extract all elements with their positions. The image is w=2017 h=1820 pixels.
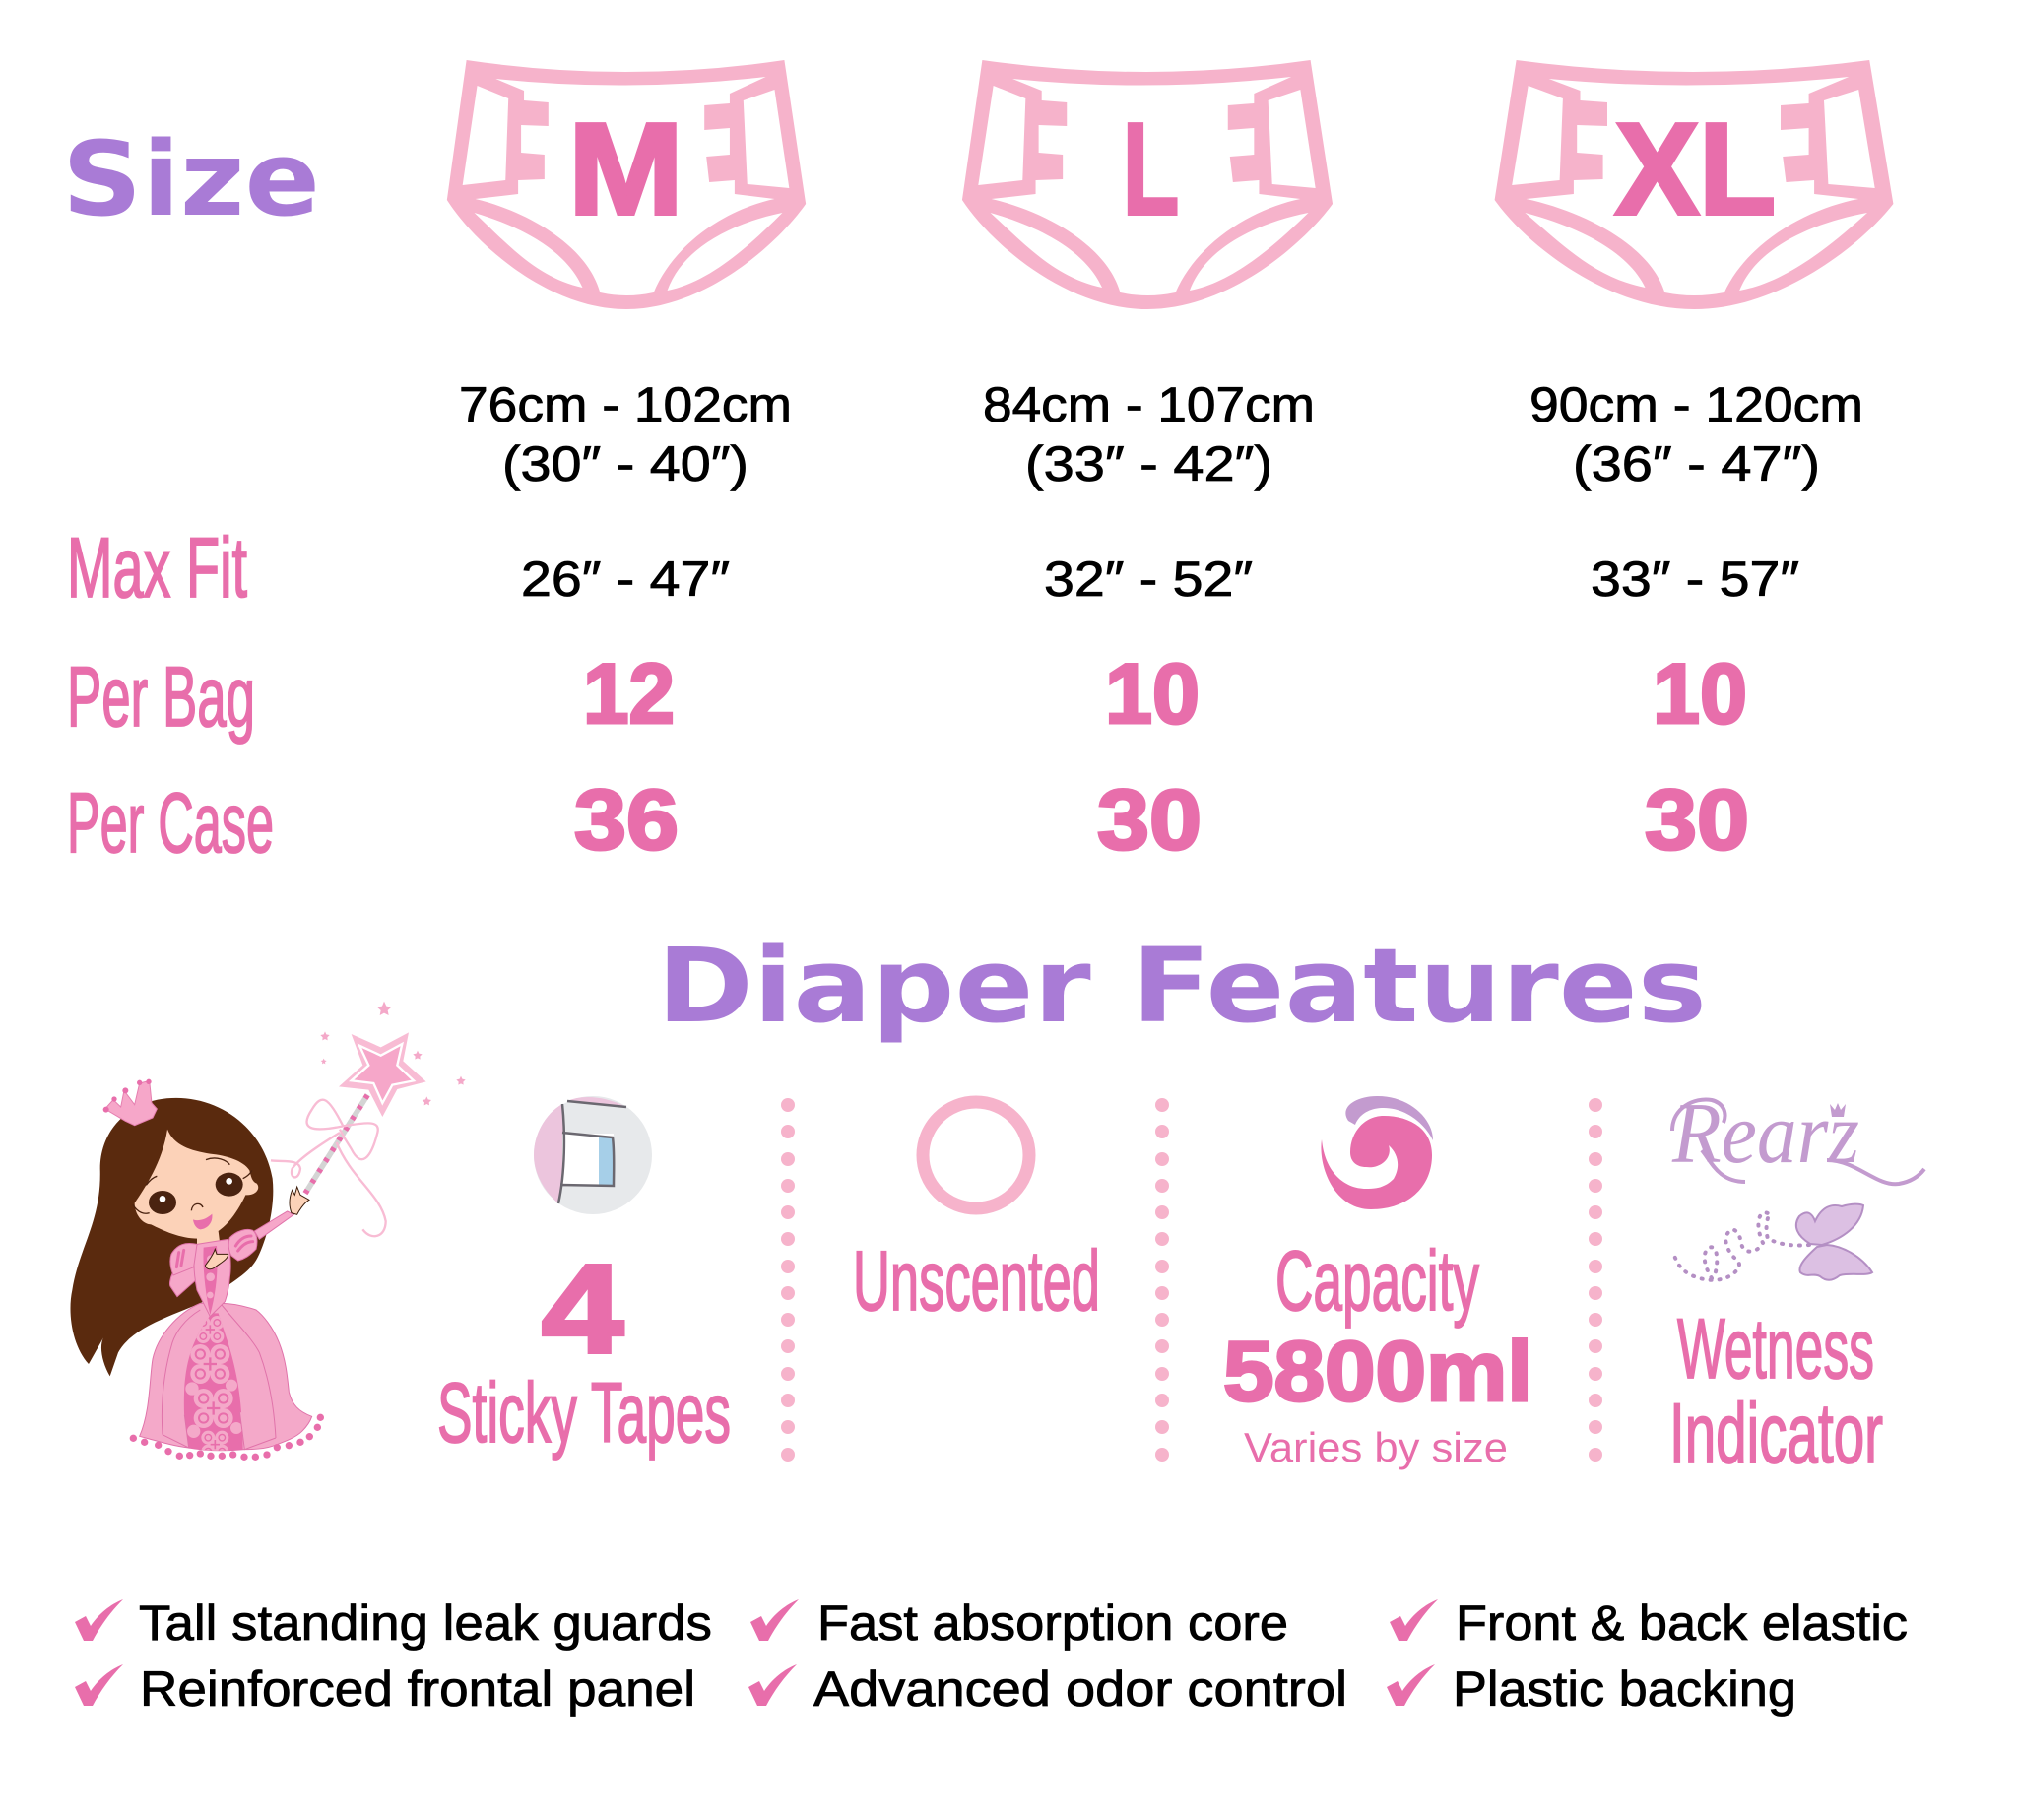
icon: tape — [534, 1096, 652, 1214]
row values: Per Case: 30 — [1645, 773, 1749, 868]
diaper icon: size L: L — [1123, 97, 1179, 241]
feature: sticky tapes: Sticky Tapes — [437, 1366, 731, 1461]
heading: Size: Size — [62, 119, 320, 239]
waist measurements: M: (30″ - 40″) — [502, 436, 748, 491]
diaper icon: size XL — [1495, 60, 1893, 309]
dotted divider 1 — [781, 1098, 795, 1462]
face — [133, 1130, 258, 1248]
hair — [70, 1098, 273, 1376]
waist measurements: L: 84cm - 107cm — [983, 377, 1315, 432]
row values: Per Bag — [583, 647, 1747, 742]
row values: Max Fit: 32″ - 52″ — [1044, 552, 1253, 607]
row values: Per Case — [574, 773, 1749, 868]
row values: Per Case: 36 — [574, 773, 679, 868]
feature: sticky tapes: 4 — [542, 1239, 623, 1380]
row values: Per Bag: 10 — [1105, 647, 1200, 742]
checklist: middle column: Fast absorption core — [817, 1595, 1288, 1651]
diaper icon: size M: M — [568, 97, 683, 241]
dress — [140, 1187, 312, 1459]
heading: Diaper Features: Diaper Features — [657, 926, 1707, 1046]
row values: Max Fit: 33″ - 57″ — [1591, 552, 1799, 607]
row label: Max Fit: Max Fit — [67, 521, 247, 616]
crown — [103, 1079, 157, 1126]
waist measurements: XL: (36″ - 47″) — [1573, 436, 1820, 491]
row label: Per Bag: Per Bag — [67, 650, 255, 745]
checklist: right column: Plastic backing — [1453, 1661, 1796, 1717]
feature: capacity — [1223, 1096, 1532, 1470]
feature: unscented: Unscented — [853, 1234, 1100, 1329]
row values: Per Bag: 10 — [1653, 647, 1747, 742]
checklist: right column — [1387, 1595, 1908, 1717]
feature: wetness indicator — [1669, 1086, 1924, 1481]
waist measurements: XL: 90cm - 120cm — [1529, 377, 1863, 432]
diaper icon: size XL: XL — [1615, 97, 1776, 241]
checklist: middle column: Advanced odor control — [813, 1661, 1347, 1717]
logo: Rearz: Rearz — [1671, 1086, 1859, 1182]
icon: swirl — [1321, 1096, 1433, 1209]
row values: Per Bag: 12 — [583, 647, 675, 742]
diaper icon: size M — [447, 60, 806, 309]
row values: Per Case: 30 — [1097, 773, 1202, 868]
dotted divider 3 — [1589, 1098, 1602, 1462]
feature: sticky tapes — [437, 1096, 731, 1461]
checklist: middle column — [748, 1595, 1347, 1717]
feature: capacity: Varies by size — [1244, 1424, 1508, 1470]
illustration: princess with wand — [70, 1002, 466, 1461]
icon: ring — [923, 1102, 1029, 1208]
waist measurements: M — [459, 377, 792, 491]
pearl hem — [130, 1414, 324, 1461]
diaper icon: size L — [962, 60, 1333, 309]
icon: butterfly — [1673, 1204, 1872, 1280]
waist measurements: M: 76cm - 102cm — [459, 377, 792, 432]
checklist: left column: Tall standing leak guards — [139, 1595, 712, 1651]
waist measurements: L: (33″ - 42″) — [1025, 436, 1272, 491]
waist measurements: L — [983, 377, 1315, 491]
feature: unscented — [853, 1102, 1100, 1329]
feature: capacity: 5800ml — [1223, 1325, 1532, 1419]
feature: wetness indicator: Indicator — [1669, 1387, 1883, 1481]
row values: Max Fit — [521, 552, 1799, 607]
checklist: right column: Front & back elastic — [1456, 1595, 1908, 1651]
checklist: left column: Reinforced frontal panel — [140, 1661, 695, 1717]
wand star — [320, 1002, 466, 1117]
feature: capacity: Capacity — [1275, 1234, 1479, 1329]
dotted divider 2 — [1155, 1098, 1169, 1462]
waist measurements: XL — [1529, 377, 1863, 491]
row values: Max Fit: 26″ - 47″ — [521, 552, 730, 607]
feature: wetness indicator: Wetness — [1677, 1302, 1874, 1397]
row label: Per Case: Per Case — [67, 776, 274, 871]
wand stick and ribbon — [271, 1095, 386, 1236]
checklist: left column — [75, 1595, 712, 1717]
